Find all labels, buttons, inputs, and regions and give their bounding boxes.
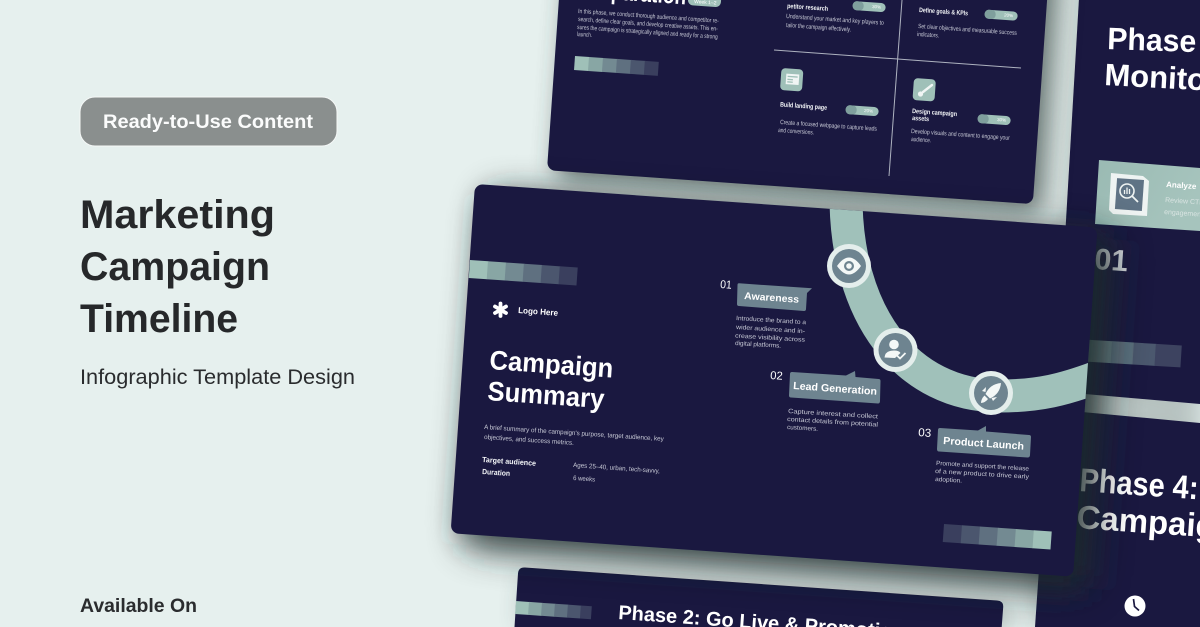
phase 1 description: sures the campaign is strategically aligned and ready for a strong <box>577 24 718 41</box>
task: design campaign assets: audience. <box>911 136 931 144</box>
step 03: product launch: Promote and support the release <box>936 460 1030 473</box>
task: design campaign assets: Design campaign <box>912 108 957 118</box>
summary details: Duration <box>482 467 511 478</box>
badge: Ready-to-Use Content: Ready-to-Use Content <box>103 111 314 133</box>
task: define goals: 20% <box>1004 13 1013 18</box>
callout <box>789 371 880 404</box>
panel: phase 4 campaign slide <box>1035 409 1200 627</box>
clock icon <box>1124 596 1146 616</box>
campaign summary heading <box>487 345 614 414</box>
task: competitor research: Understand your market and key players to <box>786 13 885 27</box>
summary description: A brief summary of the campaign's purpose, target audience, key <box>484 424 665 443</box>
shadow: right slides <box>1035 0 1200 627</box>
task: competitor research <box>786 1 886 34</box>
summary details <box>482 455 660 484</box>
step 02: lead generation: contact details from potential <box>787 416 878 429</box>
step 03: product launch: 03 <box>918 427 932 440</box>
callout <box>737 283 812 311</box>
phase 3 heading: Phase <box>1107 21 1197 59</box>
step 03: product launch: Product Launch <box>943 436 1024 453</box>
task: define goals: indicators. <box>917 31 939 40</box>
step 03: product launch: adoption. <box>935 476 963 485</box>
logo <box>495 304 559 318</box>
colour bar <box>1059 338 1182 367</box>
shadow: main slide tight <box>459 194 1105 587</box>
panel: campaign summary slide <box>451 184 1097 577</box>
step 02: lead generation: Lead Generation <box>793 381 877 398</box>
available on label: Available On <box>80 596 197 617</box>
task: design campaign assets: Develop visuals and content to engage your <box>911 128 1010 142</box>
phase 1 description: In this phase, we conduct thorough audience and competitor re- <box>578 8 719 25</box>
callout <box>937 426 1031 458</box>
campaign summary heading: Summary <box>487 376 605 414</box>
week pill <box>688 0 721 7</box>
step 01: awareness: crease visibility across <box>735 333 805 344</box>
phase 4 heading <box>1076 461 1200 546</box>
summary details: Target audience <box>482 455 536 468</box>
icon: analyze magnifier <box>1109 173 1149 216</box>
shadow: top slide <box>557 0 1067 213</box>
quadrant dividers <box>774 0 1021 176</box>
task: define goals <box>917 7 1018 40</box>
logo: Logo Here <box>518 305 559 318</box>
shadow: main slide wide <box>467 196 1113 589</box>
phase 3 heading <box>1104 21 1200 97</box>
icon: person check node <box>874 328 918 372</box>
panel: phase 3 monitoring slide <box>1056 0 1200 404</box>
title: Marketing <box>80 193 275 237</box>
step 02: lead generation: 02 <box>770 370 783 383</box>
colour bar <box>574 56 659 76</box>
icon: rocket node <box>969 371 1013 415</box>
step 02: lead generation: Capture interest and collect <box>788 408 878 421</box>
icon: landing page <box>780 68 803 91</box>
shadow: bottom slide <box>524 575 1012 627</box>
title: Campaign <box>80 245 270 289</box>
summary details: 6 weeks <box>573 475 596 484</box>
task: build landing page: 20% <box>864 108 873 114</box>
badge: Ready-to-Use Content <box>80 97 337 146</box>
panel: phase 2 go live slide <box>514 567 1003 627</box>
task: competitor research: tailor the campaign effectively. <box>786 22 851 34</box>
step 02: lead generation: customers. <box>787 424 818 433</box>
step 01: awareness: wider audience and in- <box>735 324 805 335</box>
title: Timeline <box>80 297 238 341</box>
subtitle: Infographic Template Design <box>80 366 355 389</box>
task: competitor research: 30% <box>872 4 881 10</box>
summary details: Ages 25–40, urban, tech-savvy, <box>573 462 660 475</box>
step 01: awareness <box>720 279 812 350</box>
teal task card: Analyze <box>1166 180 1197 191</box>
number 01: 01 <box>1094 243 1129 278</box>
task: define goals: Set clear objectives and measurable success <box>918 23 1017 37</box>
phase 1 description <box>577 8 719 41</box>
task: build landing page <box>778 68 879 137</box>
colour bar <box>515 601 592 619</box>
icon: eye node <box>827 244 871 288</box>
task: design campaign assets: assets <box>912 115 930 123</box>
summary description: objectives, and success metrics. <box>484 434 574 447</box>
step 03: product launch: of a new product to drive early <box>935 468 1030 481</box>
phase 1 description: search, define clear goals, and develop creative assets. This en- <box>578 16 718 33</box>
task: design campaign assets <box>911 78 1011 144</box>
task: competitor research: petitor research <box>787 3 828 13</box>
task: build landing page: Build landing page <box>780 102 827 112</box>
step 03: product launch <box>918 426 1031 485</box>
campaign summary heading: Campaign <box>489 345 614 384</box>
timeline track <box>846 190 1095 396</box>
phase 1 description: launch. <box>577 31 592 39</box>
colour bar top left <box>469 260 578 285</box>
task: build landing page: and conversions. <box>778 127 814 137</box>
teal task card <box>1095 160 1200 231</box>
task: build landing page: Create a focused webpage to capture leads <box>780 119 877 133</box>
step 01: awareness: 01 <box>720 279 732 292</box>
step 01: awareness: Introduce the brand to a <box>736 315 807 326</box>
title <box>80 193 275 341</box>
colour bar bottom right <box>943 524 1052 549</box>
icon: brush <box>912 78 936 101</box>
step 02: lead generation <box>770 370 880 433</box>
step 01: awareness: digital platforms. <box>735 340 781 350</box>
task: design campaign assets: 30% <box>997 117 1006 123</box>
panel: phase 1 preparation slide <box>547 0 1057 204</box>
step 01: awareness: Awareness <box>744 291 800 306</box>
task: define goals: Define goals & KPIs <box>919 7 968 17</box>
